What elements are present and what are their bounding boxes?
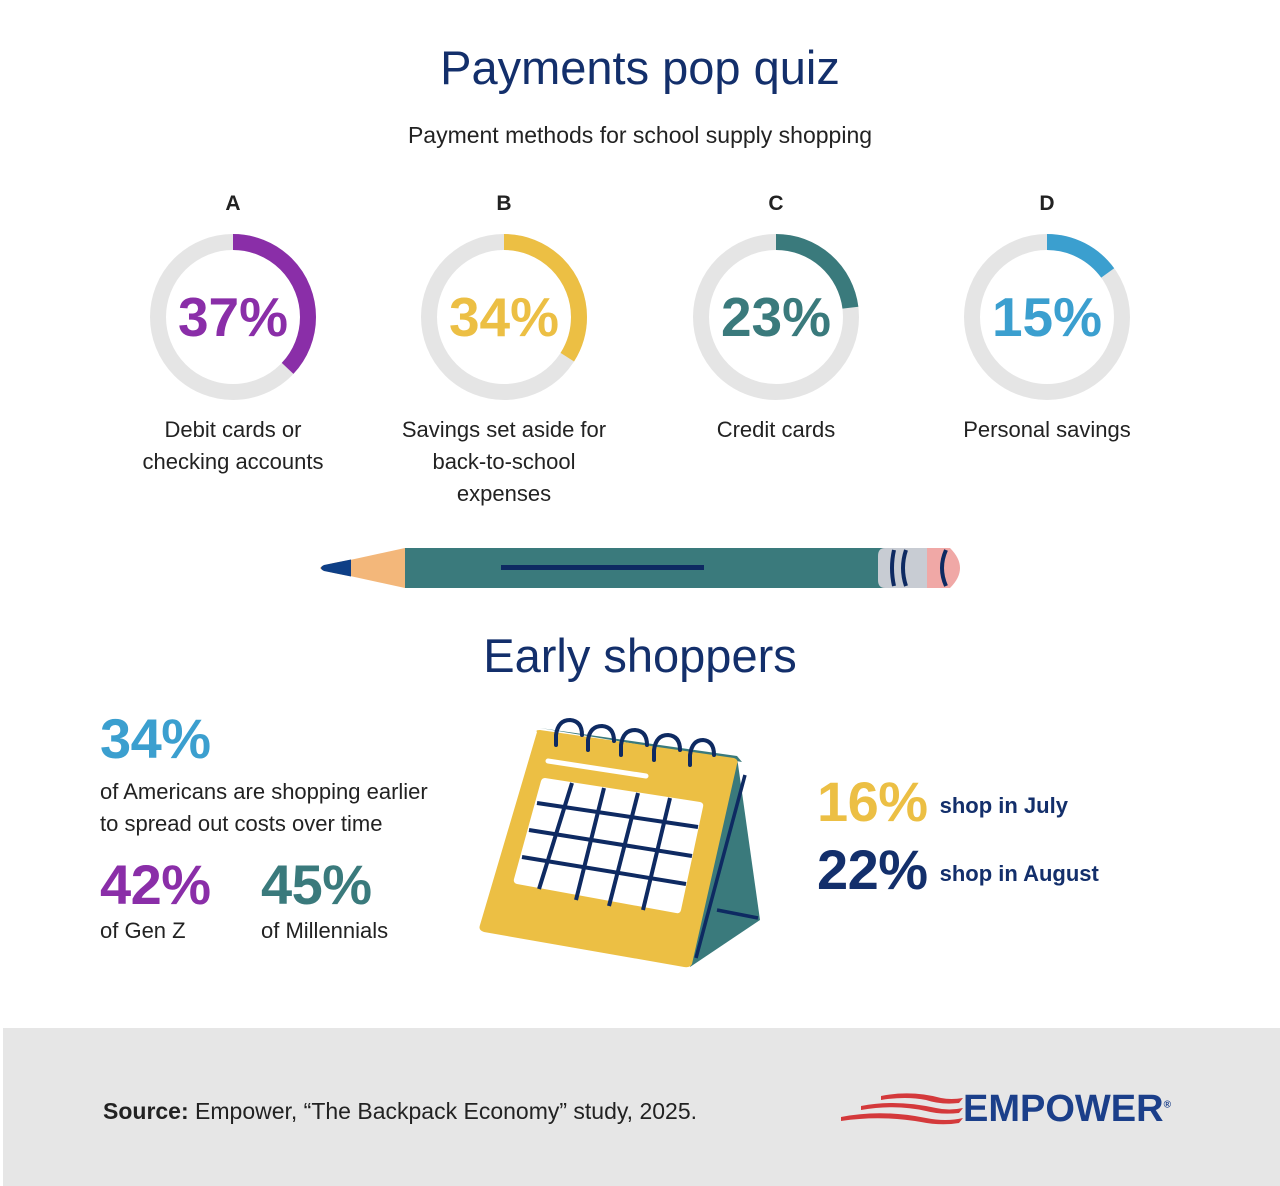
stat 34%: 34% [100,707,211,770]
footer panel [3,1028,1280,1186]
donut chart B [421,234,587,400]
stat block: Millennials [261,853,388,943]
label A: Debit cards or checking accounts [142,417,324,474]
title: Payments pop quiz [440,41,840,94]
panel: donut A [142,192,324,474]
donut chart D: 15% [992,286,1102,348]
heading: early shoppers: Early shoppers [483,629,797,682]
donut chart B: 34% [449,286,559,348]
letter C: C [768,192,784,215]
logo: Empower: EMPOWER® [963,1088,1171,1130]
panel: donut D [963,192,1131,442]
panel: donut C [693,192,859,442]
donut chart C [693,234,859,400]
letter B: B [496,192,512,215]
icon: pencil [320,548,960,588]
donut chart A [150,234,316,400]
label C: Credit cards [717,417,835,442]
donut chart A: 37% [178,286,288,348]
donut chart D [964,234,1130,400]
label D: Personal savings [963,417,1131,442]
stat block: Gen Z: of Gen Z [100,918,186,943]
logo: Empower [841,1088,1171,1130]
stat block: 34% Americans [100,707,428,836]
letter A: A [225,192,241,215]
source text: Source: Empower, “The Backpack Economy” study, 2025. [103,1098,697,1124]
stat block: Millennials: of Millennials [261,918,388,943]
stat: July: 16% shop in July [817,770,1068,833]
donut chart C: 23% [721,286,831,348]
stat text: of Americans are shopping earlier to spread out costs over time [100,779,428,836]
subtitle: Payment methods for school supply shopping [408,122,872,148]
stat block: Millennials: 45% [261,853,372,916]
panel: donut B [402,192,606,506]
letter D: D [1039,192,1055,215]
stat: August: 22% shop in August [817,838,1099,901]
label B: Savings set aside for back-to-school expenses [402,417,606,506]
stat block: Gen Z: 42% [100,853,211,916]
